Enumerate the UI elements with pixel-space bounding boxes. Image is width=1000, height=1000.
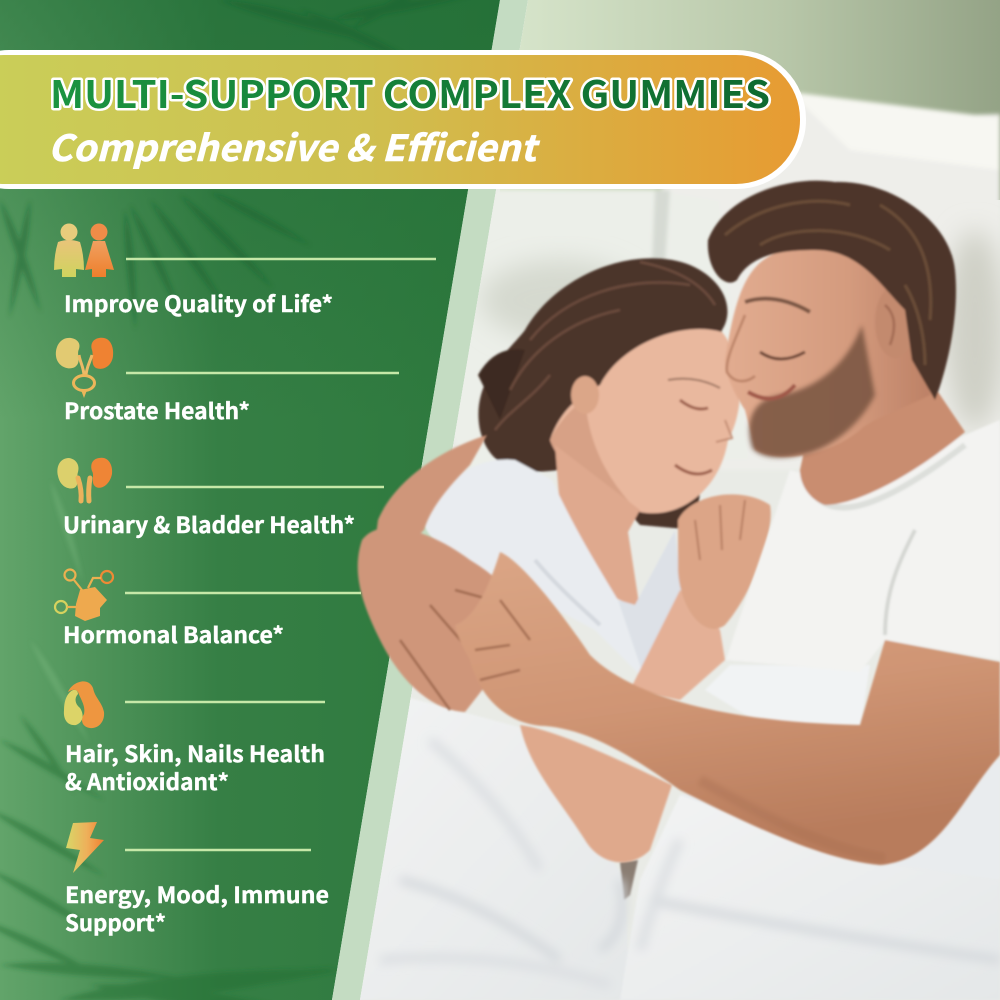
feature: hormonal balance [55, 570, 361, 650]
photo: couple sleeping in bed [340, 0, 1000, 1000]
label: & Antioxidant* [65, 765, 229, 797]
icon: two people [54, 224, 114, 277]
subtitle: Comprehensive & Efficient [48, 120, 540, 172]
man's face [725, 248, 930, 457]
label: Energy, Mood, Immune [65, 878, 329, 910]
feature: prostate health: Prostate Health* [64, 394, 250, 426]
pillow under the couple [500, 90, 1000, 259]
light diagonal strip [332, 0, 528, 1000]
feature: improve quality of life: Improve Quality of Life* [64, 287, 333, 319]
label: Support* [65, 906, 166, 938]
feature: prostate health [56, 338, 399, 426]
woman's arm and hand [630, 590, 725, 700]
label [65, 737, 325, 797]
icon: woman with flowing hair [64, 681, 104, 728]
woman's shirt [424, 460, 685, 680]
man's forearm and hand [455, 552, 1000, 865]
white sheets [374, 665, 870, 966]
icon: lightning bolt [66, 822, 104, 873]
man's arm around woman [370, 435, 487, 580]
icon: kidneys and prostate [56, 338, 113, 398]
feature: hair, skin, nails health [64, 681, 325, 797]
title: MULTI-SUPPORT COMPLEX GUMMIES [50, 64, 770, 119]
feature: urinary and bladder health: Urinary & Bladder Health* [63, 508, 355, 540]
man's shirt [726, 420, 1000, 672]
label: Hair, Skin, Nails Health [65, 737, 325, 769]
woman [424, 258, 771, 862]
man's neck [800, 380, 965, 505]
woman's neck [555, 445, 640, 610]
man's hair [708, 181, 956, 400]
icon: kidneys with ureters [57, 458, 112, 501]
feature: hormonal balance: Hormonal Balance* [63, 618, 284, 650]
feature: urinary and bladder health [57, 458, 384, 540]
banner [0, 50, 806, 189]
icon: molecule [55, 570, 113, 621]
feature: improve quality of life [54, 224, 436, 319]
label [65, 878, 329, 938]
panel: green feature panel with palm leaves [0, 0, 520, 1000]
feature: energy, mood, immune support [65, 822, 329, 938]
man [358, 181, 1000, 865]
man's beard [749, 325, 875, 458]
